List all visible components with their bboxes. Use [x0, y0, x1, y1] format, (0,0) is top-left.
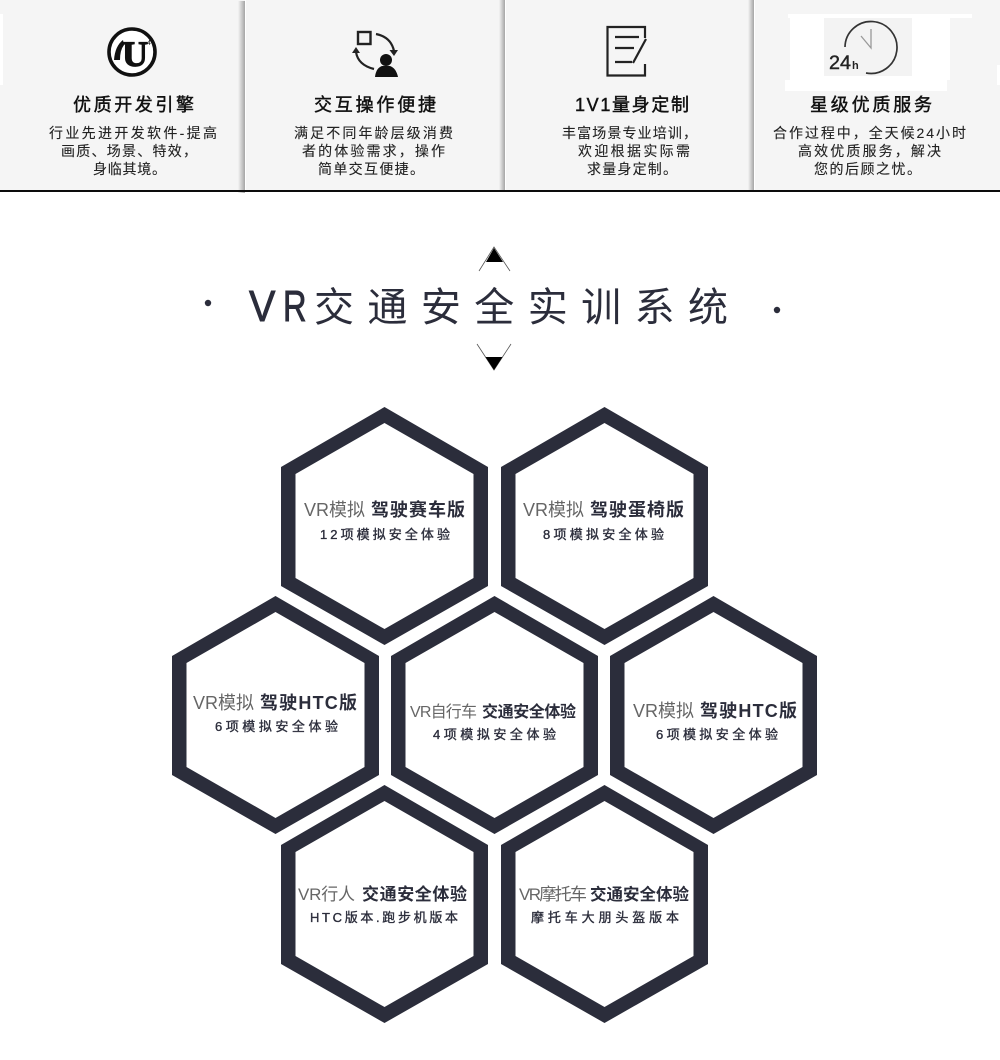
- panel: customization: [562, 27, 697, 177]
- text: service description: 高效优质服务，解决: [798, 143, 941, 159]
- hexagon: bicycle: [391, 596, 598, 834]
- hexagon: bicycle: 4项模拟安全体验: [433, 727, 556, 742]
- decorative dot right: [774, 307, 780, 313]
- panel: service: [773, 14, 972, 177]
- text: customization description: 欢迎根据实际需: [578, 143, 690, 159]
- hexagon: HTC right: VR模拟: [633, 701, 694, 721]
- hexagon: racing: [281, 407, 488, 645]
- text: interaction description: 满足不同年龄层级消费: [294, 125, 453, 141]
- hexagon: HTC right: [610, 596, 817, 834]
- hexagon: HTC right: 6项模拟安全体验: [656, 727, 778, 742]
- heading: service: 星级优质服务: [810, 95, 932, 115]
- text: service description: 合作过程中，全天候24小时: [773, 125, 966, 141]
- hexagon: racing: 12项模拟安全体验: [320, 527, 450, 542]
- hexagon: HTC left: 6项模拟安全体验: [215, 719, 338, 734]
- text: interaction description: 者的体验需求，操作: [302, 143, 445, 159]
- icon: 24h clock: h: [852, 60, 859, 72]
- text: customization description: 求量身定制。: [587, 161, 677, 177]
- title: V: [249, 281, 275, 330]
- icon: up arrow: [479, 247, 510, 271]
- panel: engine: [49, 29, 217, 177]
- hexagon: egg chair: VR模拟: [523, 500, 584, 520]
- hexagon: egg chair: 8项模拟安全体验: [543, 527, 664, 542]
- hexagon: bicycle: 交通安全体验: [482, 702, 576, 721]
- feature strip: [0, 0, 1000, 193]
- hexagon: pedestrian: 交通安全体验: [362, 884, 467, 904]
- hexagon: pedestrian: HTC版本.跑步机版本: [310, 910, 458, 925]
- text: engine description: 画质、场景、特效，: [61, 143, 197, 159]
- hexagon: motorcycle: 摩托车大朋头盔版本: [531, 910, 679, 925]
- text: engine description: 行业先进开发软件-提高: [49, 125, 217, 141]
- decorative dot left: [205, 300, 211, 306]
- hexagon: motorcycle: VR摩托车: [519, 885, 587, 904]
- icon: unreal engine logo: U: [122, 34, 148, 74]
- heading: interaction: 交互操作便捷: [314, 95, 436, 115]
- hexagon: HTC left: VR模拟: [193, 693, 254, 713]
- icon: unreal engine logo: 4: [147, 40, 151, 47]
- hexagon: HTC left: 驾驶HTC版: [260, 693, 357, 713]
- text: engine description: 身临其境。: [93, 161, 166, 177]
- icon: document: [608, 27, 646, 76]
- icon: unreal engine logo: [109, 29, 155, 75]
- title: R: [283, 282, 307, 331]
- text: customization description: [562, 125, 697, 177]
- icon: down arrow: [477, 344, 511, 370]
- heading: engine: 优质开发引擎: [73, 95, 194, 115]
- hexagon: pedestrian: [281, 785, 488, 1023]
- hexagon: motorcycle: [501, 785, 708, 1023]
- panel: interaction: [294, 32, 453, 177]
- heading: customization: 1V1量身定制: [575, 95, 689, 115]
- text: service description: [773, 125, 966, 177]
- hexagon: motorcycle: 交通安全体验: [590, 884, 690, 904]
- hexagon: pedestrian: VR行人: [298, 885, 355, 904]
- hexagon: bicycle: VR自行车: [410, 703, 477, 721]
- text: customization description: 丰富场景专业培训，: [562, 125, 697, 141]
- text: service description: 您的后顾之忧。: [814, 161, 921, 177]
- hexagon: HTC left: [172, 596, 379, 834]
- hexagon: egg chair: 驾驶蛋椅版: [590, 500, 684, 520]
- hexagon: racing: 驾驶赛车版: [371, 499, 465, 520]
- icon: 24h clock: [785, 14, 972, 91]
- hexagon: racing: VR模拟: [304, 500, 365, 520]
- text: interaction description: 简单交互便捷。: [318, 161, 424, 177]
- hexagon: egg chair: [501, 407, 708, 645]
- text: interaction description: [294, 125, 453, 177]
- text: engine description: [49, 125, 217, 177]
- icon: 24h clock: 24: [829, 53, 851, 74]
- icon: interaction person: [352, 32, 398, 77]
- hexagon: HTC right: 驾驶HTC版: [700, 701, 797, 721]
- title: 交通安全实训系统: [314, 286, 728, 330]
